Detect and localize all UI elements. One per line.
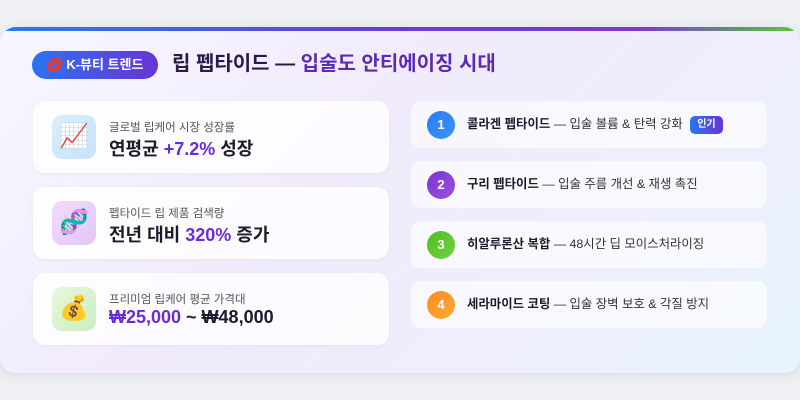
stat card: growth: 글로벌 립케어 시장 성장률 <box>109 122 235 134</box>
title: 립 펩타이드 — 입술도 안티에이징 시대 <box>172 53 496 75</box>
item 4: 세라마이드 코팅 — 입술 장벽 보호 & 각질 방지 <box>467 297 709 311</box>
stat card: growth: 연평균 +7.2% 성장 <box>109 139 253 159</box>
stat card: price <box>33 273 389 345</box>
badge: 💋 K-뷰티 트렌드 <box>47 57 143 72</box>
stat card: price: 프리미엄 립케어 평균 가격대 <box>109 294 246 306</box>
stat card: growth <box>33 101 389 173</box>
icon: dna: 🧬 <box>59 209 89 236</box>
item 1: 콜라겐 펩타이드 — 입술 볼륨 & 탄력 강화 <box>467 117 683 131</box>
item 3: 히알루론산 복합 — 48시간 딥 모이스처라이징 <box>467 237 704 251</box>
stat card: search: 펩타이드 립 제품 검색량 <box>109 208 224 220</box>
item 1: 1 <box>437 116 445 132</box>
icon: chart: 📈 <box>59 123 89 150</box>
item 2: 2 <box>437 176 445 192</box>
item 2: 구리 펩타이드 — 입술 주름 개선 & 재생 촉진 <box>467 177 698 191</box>
item 4: 4 <box>437 296 445 312</box>
icon: money bag: 💰 <box>59 295 89 322</box>
item 3 <box>411 221 767 268</box>
item 3: 3 <box>437 236 445 252</box>
icon: chart <box>52 115 96 159</box>
item 4 <box>411 281 767 328</box>
stat card: search: 전년 대비 320% 증가 <box>109 225 269 245</box>
item 2 <box>411 161 767 208</box>
stat card: search <box>33 187 389 259</box>
item 1: 인기 <box>697 119 716 130</box>
stat card: price: ₩25,000 ~ ₩48,000 <box>109 307 274 327</box>
icon: dna <box>52 201 96 245</box>
item 1 <box>411 101 767 148</box>
icon: money bag <box>52 287 96 331</box>
badge <box>32 51 158 79</box>
